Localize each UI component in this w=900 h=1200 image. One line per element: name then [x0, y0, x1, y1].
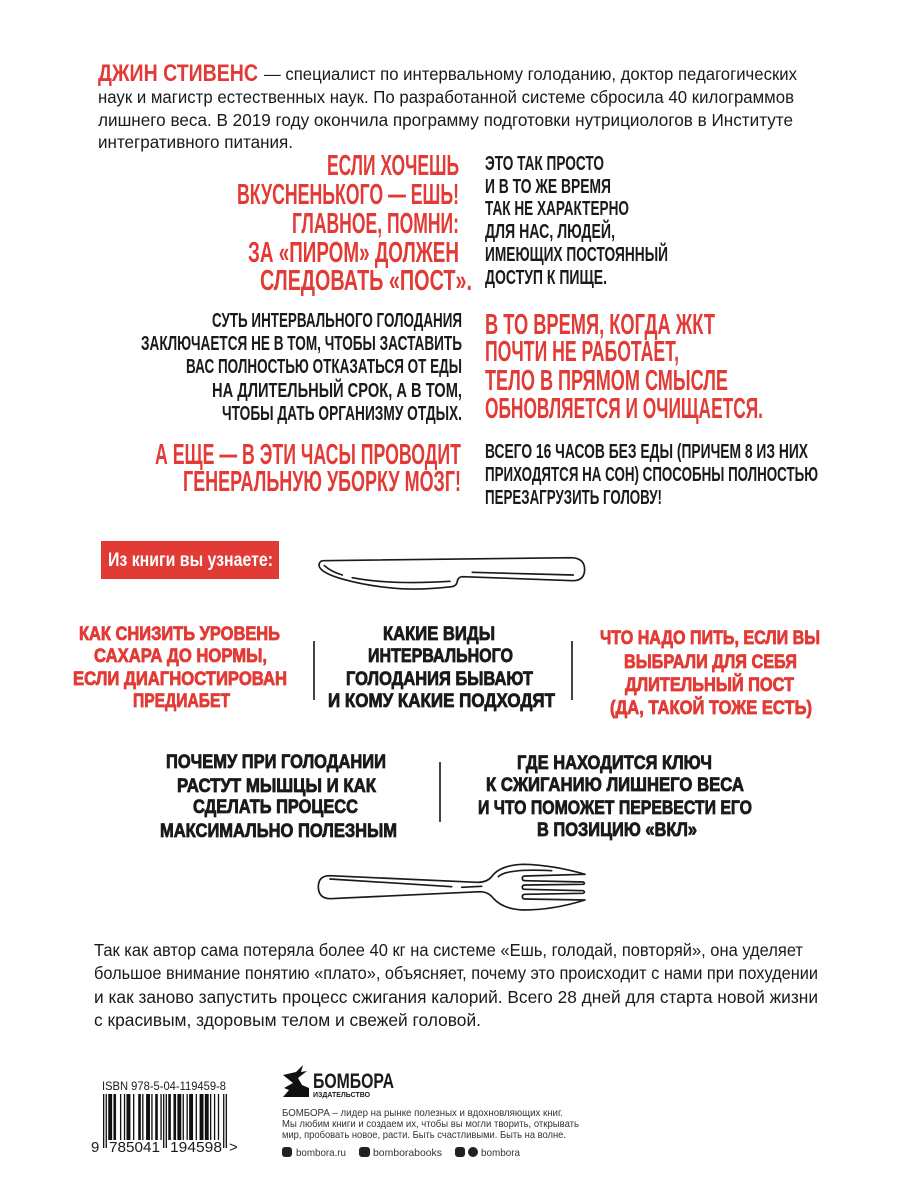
- black text: so simple: ЭТО ТАК ПРОСТО: [485, 152, 604, 175]
- publisher description: мир, пробовать новое, расти. Быть счастливыми. Быть на волне.: [282, 1129, 566, 1141]
- red quote: feast and fast: СЛЕДОВАТЬ «ПОСТ».: [260, 265, 472, 297]
- topic: what to drink: ДЛИТЕЛЬНЫЙ ПОСТ: [625, 674, 794, 696]
- black text: so simple: ТАК НЕ ХАРАКТЕРНО: [485, 197, 629, 220]
- ISBN barcode: 194598: [170, 1139, 222, 1156]
- author bio: — специалист по интервальному голоданию, доктор педагогических: [264, 64, 797, 84]
- black text: so simple: ДОСТУП К ПИЩЕ.: [485, 266, 607, 289]
- topic: muscles: ПОЧЕМУ ПРИ ГОЛОДАНИИ: [166, 752, 386, 773]
- summary paragraph: и как заново запустить процесс сжигания калорий. Всего 28 дней для старта новой жизни: [94, 987, 818, 1007]
- topic: fasting types: ГОЛОДАНИЯ БЫВАЮТ: [346, 669, 533, 690]
- divider: [439, 762, 441, 822]
- topic: muscles: СДЕЛАТЬ ПРОЦЕСС: [193, 797, 358, 818]
- summary paragraph: с красивым, здоровым телом и свежей головой.: [94, 1010, 481, 1030]
- black text: essence of fasting: ЧТОБЫ ДАТЬ ОРГАНИЗМУ ОТДЫХ.: [222, 402, 462, 425]
- topic: fasting types: И КОМУ КАКИЕ ПОДХОДЯТ: [328, 691, 555, 712]
- black text: essence of fasting: ВАС ПОЛНОСТЬЮ ОТКАЗАТЬСЯ ОТ ЕДЫ: [186, 355, 462, 378]
- red quote: brain cleaning: А ЕЩЕ — В ЭТИ ЧАСЫ ПРОВОДИТ: [155, 439, 461, 471]
- topic: blood sugar: ЕСЛИ ДИАГНОСТИРОВАН: [73, 669, 287, 690]
- author bio: интегративного питания.: [98, 132, 293, 152]
- black text: essence of fasting: [141, 309, 462, 425]
- topic: weight key: [478, 753, 752, 841]
- summary paragraph: большое внимание понятию «плато», объясняет, почему это происходит с нами при похудении: [94, 963, 818, 983]
- publisher social links: bomborabooks: [373, 1147, 442, 1159]
- black text: essence of fasting: СУТЬ ИНТЕРВАЛЬНОГО ГОЛОДАНИЯ: [212, 309, 462, 332]
- topic: what to drink: (ДА, ТАКОЙ ТОЖЕ ЕСТЬ): [610, 697, 812, 719]
- publisher description: [282, 1107, 579, 1141]
- author bio: лишнего веса. В 2019 году окончила программу подготовки нутрициологов в Институте: [98, 110, 793, 130]
- black text: essence of fasting: НА ДЛИТЕЛЬНЫЙ СРОК, А В ТОМ,: [212, 378, 462, 402]
- ISBN barcode: ISBN 978-5-04-119459-8: [102, 1081, 226, 1093]
- red quote: body renews: ТЕЛО В ПРЯМОМ СМЫСЛЕ: [485, 365, 728, 397]
- red quote: body renews: ПОЧТИ НЕ РАБОТАЕТ,: [485, 336, 679, 368]
- ISBN barcode: 9: [91, 1139, 99, 1156]
- publisher social links: [282, 1147, 520, 1159]
- topic: blood sugar: САХАРА ДО НОРМЫ,: [94, 646, 267, 667]
- publisher logo: БОМБОРА: [313, 1070, 394, 1093]
- publisher social links: bombora: [481, 1147, 520, 1159]
- red quote: feast and fast: ЕСЛИ ХОЧЕШЬ: [327, 150, 459, 182]
- topic: weight key: К СЖИГАНИЮ ЛИШНЕГО ВЕСА: [486, 775, 744, 796]
- publisher logo: ИЗДАТЕЛЬСТВО: [313, 1090, 370, 1099]
- black text: essence of fasting: ЗАКЛЮЧАЕТСЯ НЕ В ТОМ, ЧТОБЫ ЗАСТАВИТЬ: [141, 332, 462, 355]
- topic: weight key: И ЧТО ПОМОЖЕТ ПЕРЕВЕСТИ ЕГО: [478, 798, 752, 819]
- topic: what to drink: ВЫБРАЛИ ДЛЯ СЕБЯ: [624, 652, 797, 673]
- topic: muscles: МАКСИМАЛЬНО ПОЛЕЗНЫМ: [160, 821, 397, 842]
- topic: weight key: В ПОЗИЦИЮ «ВКЛ»: [537, 820, 697, 841]
- black text: so simple: И В ТО ЖЕ ВРЕМЯ: [485, 175, 611, 198]
- red quote: body renews: В ТО ВРЕМЯ, КОГДА ЖКТ: [485, 309, 715, 341]
- topic: blood sugar: [73, 624, 287, 712]
- black text: so simple: ИМЕЮЩИХ ПОСТОЯННЫЙ: [485, 242, 668, 266]
- red quote: feast and fast: ГЛАВНОЕ, ПОМНИ:: [292, 208, 459, 240]
- badge: from the book you will learn: Из книги вы узнаете:: [108, 550, 273, 571]
- divider: [571, 641, 573, 700]
- red quote: feast and fast: [237, 150, 472, 297]
- ISBN barcode: >: [229, 1139, 238, 1156]
- summary paragraph: [94, 940, 818, 1030]
- badge: from the book you will learn: [101, 541, 279, 579]
- topic: what to drink: ЧТО НАДО ПИТЬ, ЕСЛИ ВЫ: [600, 628, 820, 649]
- divider: [313, 641, 315, 700]
- red quote: feast and fast: ВКУСНЕНЬКОГО — ЕШЬ!: [237, 179, 459, 211]
- black text: so simple: ДЛЯ НАС, ЛЮДЕЙ,: [485, 219, 615, 243]
- topic: muscles: [160, 752, 397, 842]
- topic: what to drink: [600, 628, 820, 719]
- black text: so simple: [485, 152, 668, 289]
- black text: 16 hours: ПЕРЕЗАГРУЗИТЬ ГОЛОВУ!: [485, 486, 662, 509]
- red quote: brain cleaning: [155, 439, 461, 498]
- topic: fasting types: КАКИЕ ВИДЫ: [383, 624, 495, 645]
- ISBN barcode: 785041: [109, 1139, 160, 1156]
- topic: blood sugar: ПРЕДИАБЕТ: [133, 691, 230, 712]
- topic: fasting types: [328, 624, 555, 712]
- author bio: [98, 60, 797, 152]
- topic: fasting types: ИНТЕРВАЛЬНОГО: [368, 646, 513, 667]
- publisher social links: bombora.ru: [296, 1147, 346, 1159]
- red quote: feast and fast: ЗА «ПИРОМ» ДОЛЖЕН: [248, 237, 459, 269]
- ISBN barcode: [91, 1081, 238, 1156]
- topic: blood sugar: КАК СНИЗИТЬ УРОВЕНЬ: [79, 624, 280, 645]
- summary paragraph: Так как автор сама потеряла более 40 кг на системе «Ешь, голодай, повторяй», она уделяет: [94, 940, 803, 960]
- icon: knife: [319, 558, 585, 589]
- publisher logo: [283, 1065, 394, 1099]
- red quote: body renews: [485, 309, 763, 425]
- topic: weight key: ГДЕ НАХОДИТСЯ КЛЮЧ: [517, 753, 712, 774]
- author bio: наук и магистр естественных наук. По разработанной системе сбросила 40 килограммов: [98, 87, 794, 107]
- publisher description: БОМБОРА – лидер на рынке полезных и вдохновляющих книг.: [282, 1107, 563, 1119]
- author bio: ДЖИН СТИВЕНС: [98, 60, 258, 87]
- publisher description: Мы любим книги и создаем их, чтобы вы могли творить, открывать: [282, 1118, 579, 1130]
- topic: muscles: РАСТУТ МЫШЦЫ И КАК: [177, 776, 376, 797]
- red quote: brain cleaning: ГЕНЕРАЛЬНУЮ УБОРКУ МОЗГ!: [183, 466, 461, 498]
- icon: fork: [318, 864, 585, 910]
- black text: 16 hours: [485, 440, 818, 509]
